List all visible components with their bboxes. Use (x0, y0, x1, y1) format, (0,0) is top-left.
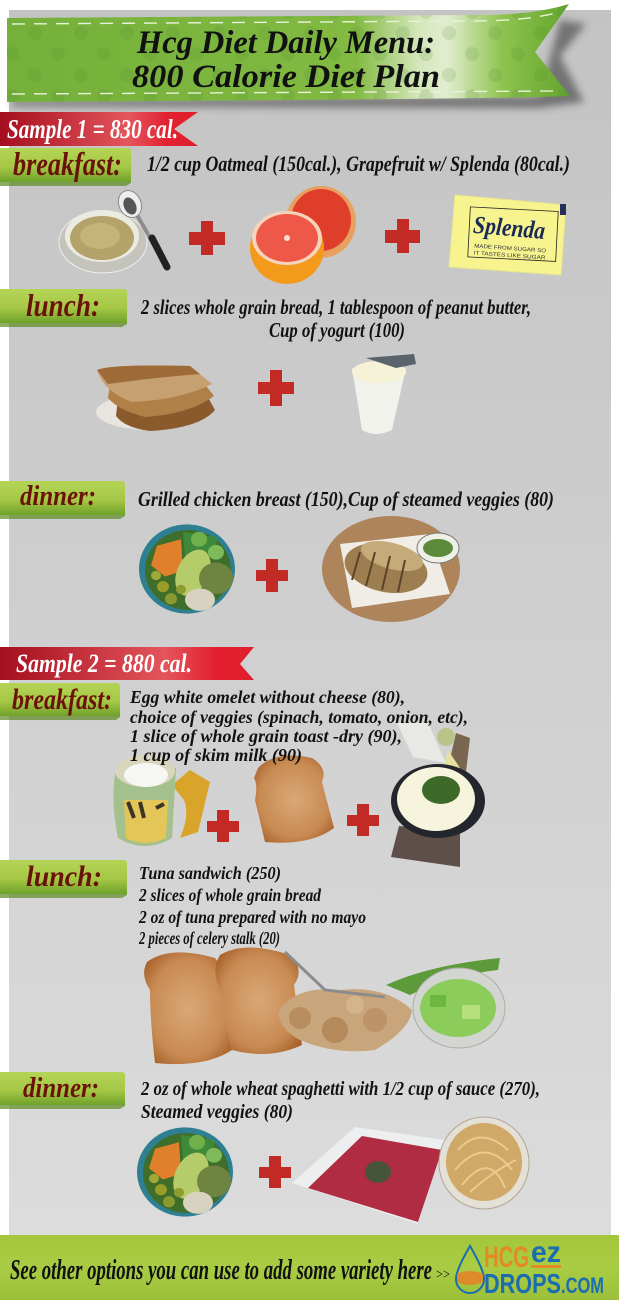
label: dinner 1: dinner: (20, 480, 96, 512)
label: breakfast 1: breakfast: (13, 147, 122, 183)
icon: stack of bread (96, 366, 215, 431)
text: breakfast 2: 1 cup of skim milk (90) (130, 745, 302, 766)
text: breakfast 2: 1 slice of whole grain toast -dry (90), (130, 726, 402, 747)
text: lunch 1: Cup of yogurt (100) (269, 318, 405, 342)
icon: plus (189, 221, 225, 255)
title text (132, 25, 440, 95)
icon: vegetable bowl (137, 1127, 233, 1217)
sample 1 banner: Sample 1 = 830 cal. (7, 114, 178, 144)
text: lunch 2: 2 pieces of celery stalk (20) (138, 928, 280, 949)
icon: plus (347, 804, 379, 836)
text: dinner 1: Grilled chicken breast (150),Cup of steamed veggies (80) (138, 487, 554, 511)
text: dinner 2: Steamed veggies (80) (141, 1101, 293, 1123)
logo: HCG ez Drops: .COM (561, 1273, 604, 1298)
icon: plus (258, 370, 294, 406)
logo: HCG ez Drops: HCG (484, 1241, 529, 1274)
icon: mug of milk (113, 755, 210, 846)
icon: splenda packet (449, 195, 566, 275)
icon: plus (256, 559, 288, 592)
label: dinner 2: dinner: (23, 1073, 99, 1104)
icon: tuna sandwich with bread, tuna and celery (144, 948, 505, 1064)
icon: vegetable bowl (139, 524, 235, 614)
icon: splenda packet: Splenda (472, 212, 546, 245)
icon: plus (207, 810, 239, 842)
title ribbon (7, 4, 586, 108)
text: dinner 2: 2 oz of whole wheat spaghetti with 1/2 cup of sauce (270), (140, 1078, 540, 1100)
label: dinner 1 (0, 480, 125, 519)
text: dinner 2 (140, 1078, 540, 1123)
text: lunch 2 (138, 863, 366, 949)
icon: plus (385, 219, 420, 253)
text: lunch 2: 2 slices of whole grain bread (138, 885, 322, 905)
label: lunch 1: lunch: (26, 287, 100, 323)
text: lunch 2: Tuna sandwich (250) (139, 863, 281, 884)
footer arrows: >> (436, 1267, 450, 1283)
text: lunch 2: 2 oz of tuna prepared with no mayo (138, 907, 366, 927)
text: breakfast 2: Egg white omelet without cheese (80), (129, 687, 405, 708)
icon: slice of toast (254, 756, 334, 843)
icon: splenda packet: MADE FROM SUGAR SO (474, 243, 547, 255)
icon: grilled chicken plate (322, 516, 460, 622)
icon: oatmeal bowl with spoon (59, 187, 167, 273)
label: lunch 1 (0, 287, 127, 327)
icon: bowl of spaghetti (439, 1117, 529, 1209)
icon: grapefruit halves (250, 186, 356, 284)
label: lunch 2 (0, 860, 127, 898)
logo: HCG ez Drops (456, 1236, 604, 1299)
icon: omelet in skillet (391, 723, 485, 867)
title text: Hcg Diet Daily Menu: (136, 25, 435, 61)
icon: splenda packet: IT TASTES LIKE SUGAR (473, 250, 546, 261)
text: lunch 1 (140, 295, 531, 342)
icon: yogurt cup (352, 354, 416, 434)
logo: HCG ez Drops: DROPS (484, 1268, 561, 1299)
label: breakfast 2: breakfast: (12, 683, 112, 716)
text: breakfast 2: choice of veggies (spinach, tomato, onion, etc), (130, 707, 468, 728)
title text: 800 Calorie Diet Plan (132, 59, 440, 95)
label: lunch 2: lunch: (26, 860, 102, 893)
text: breakfast 2 (129, 687, 468, 766)
icon: bowl of tomato sauce (292, 1127, 445, 1224)
footer bar (0, 1235, 619, 1300)
icon: plus (259, 1156, 291, 1188)
sample 2 banner: Sample 2 = 880 cal. (16, 649, 192, 678)
label: dinner 2 (0, 1072, 125, 1109)
logo: HCG ez Drops: ez (531, 1236, 561, 1269)
